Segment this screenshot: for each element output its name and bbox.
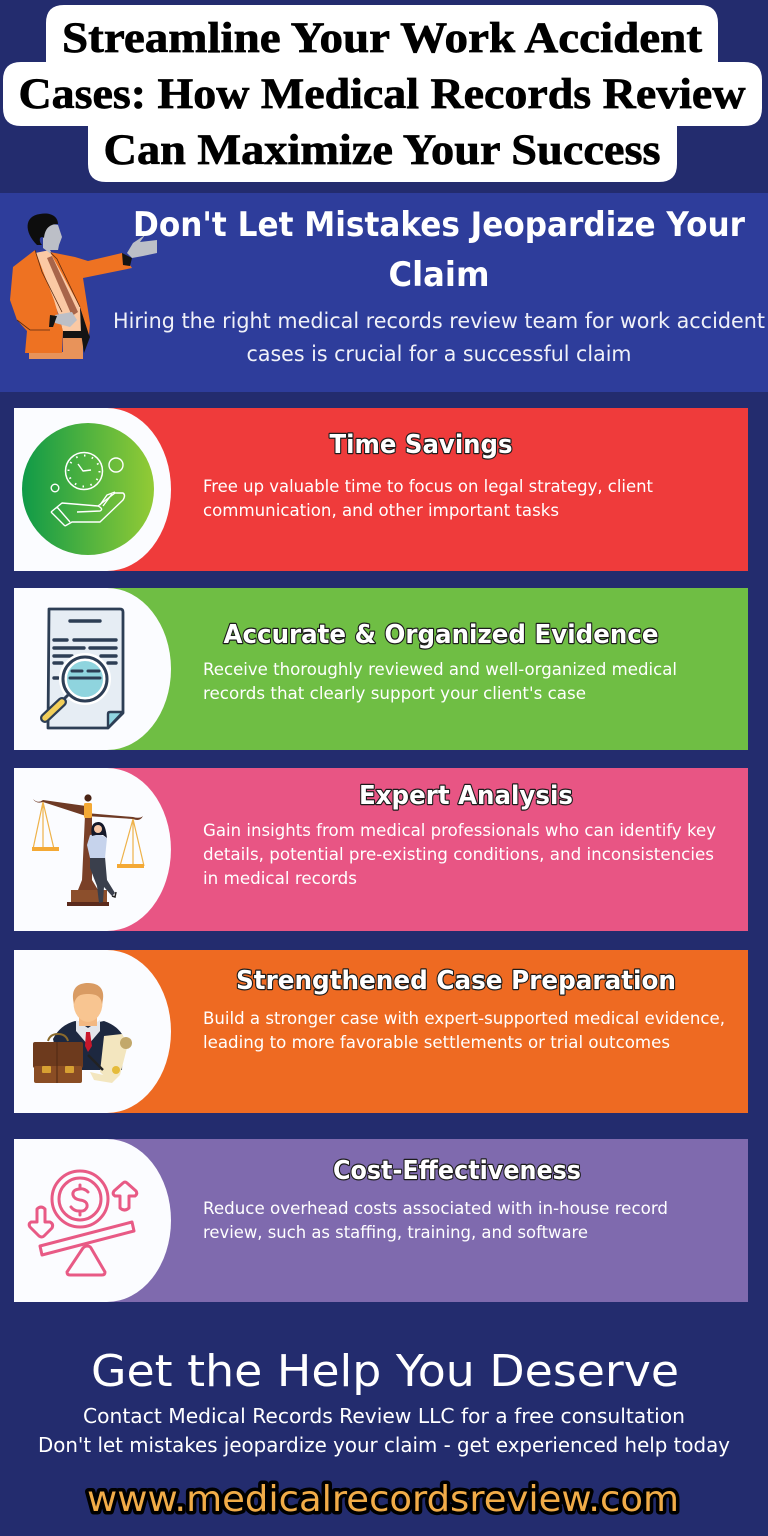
footer text xyxy=(38,1404,730,1457)
panel: intro banner: Claim xyxy=(388,255,490,295)
text: strengthened case preparation xyxy=(203,1009,725,1053)
title xyxy=(3,5,762,182)
heading: cost-effectiveness: Cost-Effectiveness xyxy=(333,1156,581,1186)
heading: expert analysis: Expert Analysis xyxy=(359,781,573,811)
panel: intro banner xyxy=(0,193,768,392)
icon: lawyer with briefcase and scroll xyxy=(33,983,132,1083)
title: Cases: How Medical Records Review xyxy=(18,71,746,118)
footer heading: Get the Help You Deserve xyxy=(91,1346,679,1397)
text: expert analysis: in medical records xyxy=(203,869,357,889)
text: cost-effectiveness: Reduce overhead costs associated with in-house record xyxy=(203,1199,668,1219)
footer text: Don't let mistakes jeopardize your claim - get experienced help today xyxy=(38,1433,730,1457)
text: time savings: Free up valuable time to focus on legal strategy, client xyxy=(203,477,653,497)
text: expert analysis: Gain insights from medical professionals who can identify key xyxy=(203,821,716,841)
icon: document with magnifier xyxy=(45,609,123,728)
panel: strengthened case preparation xyxy=(14,950,748,1113)
panel: expert analysis xyxy=(14,768,748,931)
banner text: cases is crucial for a successful claim xyxy=(246,342,632,366)
text: cost-effectiveness: review, such as staffing, training, and software xyxy=(203,1223,588,1243)
text: accurate and organized evidence: Receive thoroughly reviewed and well-organized medical xyxy=(203,660,677,680)
website url: www.medicalrecordsreview.com xyxy=(87,1479,679,1520)
text: expert analysis xyxy=(203,821,716,889)
banner text xyxy=(113,309,765,366)
text: time savings: communication, and other important tasks xyxy=(203,501,559,521)
text: expert analysis: details, potential pre-existing conditions, and inconsistencies xyxy=(203,845,714,865)
text: strengthened case preparation: leading to more favorable settlements or trial outcomes xyxy=(203,1033,670,1053)
title: Streamline Your Work Accident xyxy=(62,15,703,62)
title: Can Maximize Your Success xyxy=(104,127,660,174)
text: strengthened case preparation: Build a stronger case with expert-supported medical evidence, xyxy=(203,1009,725,1029)
text: accurate and organized evidence xyxy=(203,660,677,704)
icon: coin on seesaw with arrows xyxy=(29,1171,137,1275)
text: cost-effectiveness xyxy=(203,1199,668,1243)
text: accurate and organized evidence: records that clearly support your client's case xyxy=(203,684,586,704)
panel: cost-effectiveness xyxy=(14,1139,748,1302)
footer text: Contact Medical Records Review LLC for a free consultation xyxy=(83,1404,685,1428)
icon: scales with woman xyxy=(32,794,144,906)
heading: time savings: Time Savings xyxy=(330,430,512,460)
illustration: presenter in orange suit xyxy=(10,213,157,359)
panel: accurate and organized evidence xyxy=(14,588,748,750)
heading: strengthened case preparation: Strengthened Case Preparation xyxy=(236,966,676,996)
heading: accurate and organized evidence: Accurate & Organized Evidence xyxy=(224,620,658,650)
icon: clock in hand xyxy=(22,423,154,555)
text: time savings xyxy=(203,477,653,521)
banner text: Hiring the right medical records review team for work accident xyxy=(113,309,765,333)
panel: time savings xyxy=(14,408,748,571)
